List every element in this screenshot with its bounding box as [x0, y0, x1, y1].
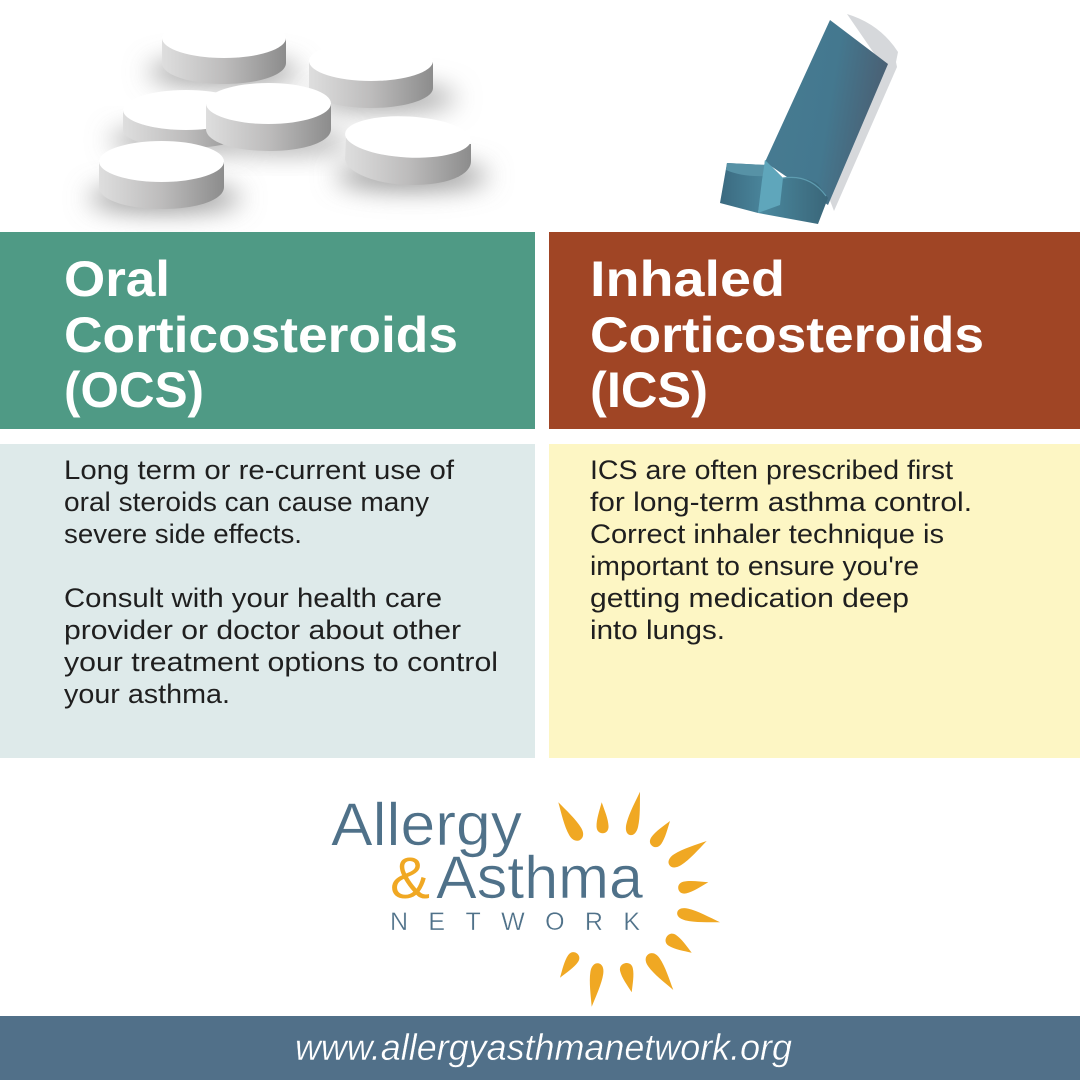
heading: OCS: (OCS): [64, 362, 204, 418]
heading: OCS: [64, 251, 458, 418]
text: side effects warning: oral steroids can cause many: [64, 487, 430, 517]
illustration: inhaler: [720, 14, 898, 224]
pill: back right: [309, 41, 433, 108]
footer bar with website: [0, 1016, 1080, 1080]
pill: middle left: [123, 90, 249, 148]
heading: OCS: Corticosteroids: [64, 307, 458, 363]
logo wordmark: &: [390, 846, 430, 911]
text: ICS explanation: into lungs.: [590, 615, 725, 645]
pill: center: [206, 83, 331, 151]
logo: Allergy & Asthma Network: [331, 790, 721, 1008]
text: side effects warning: severe side effects.: [64, 519, 302, 549]
panel: inhaled steroids description: [549, 444, 1080, 758]
inhaler mouthpiece: [720, 163, 766, 213]
logo sun rays: [552, 790, 721, 1008]
text: side effects warning: [64, 455, 455, 549]
panel: oral steroids description: [0, 444, 535, 758]
pill: front left: [99, 141, 224, 209]
heading: ICS: [590, 251, 984, 418]
text: ICS explanation: for long-term asthma control.: [590, 487, 972, 517]
logo wordmark: Asthma: [436, 844, 644, 911]
illustration: white pills: [89, 18, 488, 211]
logo wordmark: NETWORK: [390, 908, 640, 936]
heading: ICS: Inhaled: [590, 251, 785, 307]
text: ICS explanation: [590, 455, 972, 645]
heading: ICS: (ICS): [590, 362, 708, 418]
heading: OCS: Oral: [64, 251, 170, 307]
text: consult advice: provider or doctor about other: [64, 615, 461, 645]
panel: oral corticosteroids header: [0, 232, 535, 429]
panel: inhaled corticosteroids header: [549, 232, 1080, 429]
pill: right: [344, 113, 472, 185]
text: ICS explanation: Correct inhaler technique is: [590, 519, 944, 549]
pill: back left: [162, 18, 286, 84]
text: ICS explanation: getting medication deep: [590, 583, 909, 613]
logo wordmark: Allergy: [331, 791, 522, 858]
text: consult advice: [64, 583, 498, 709]
text: ICS explanation: ICS are often prescribed first: [590, 455, 954, 485]
text: consult advice: Consult with your health care: [64, 583, 442, 613]
text: consult advice: your asthma.: [64, 679, 230, 709]
inhaler canister: [765, 20, 888, 205]
inhaler shadow: [826, 14, 898, 211]
logo wordmark: [331, 791, 644, 936]
footer url: www.allergyasthmanetwork.org: [295, 1027, 792, 1068]
text: ICS explanation: important to ensure you're: [590, 551, 919, 581]
text: consult advice: your treatment options to control: [64, 647, 498, 677]
inhaler collar: [758, 160, 828, 224]
heading: ICS: Corticosteroids: [590, 307, 984, 363]
text: side effects warning: Long term or re-current use of: [64, 455, 455, 485]
